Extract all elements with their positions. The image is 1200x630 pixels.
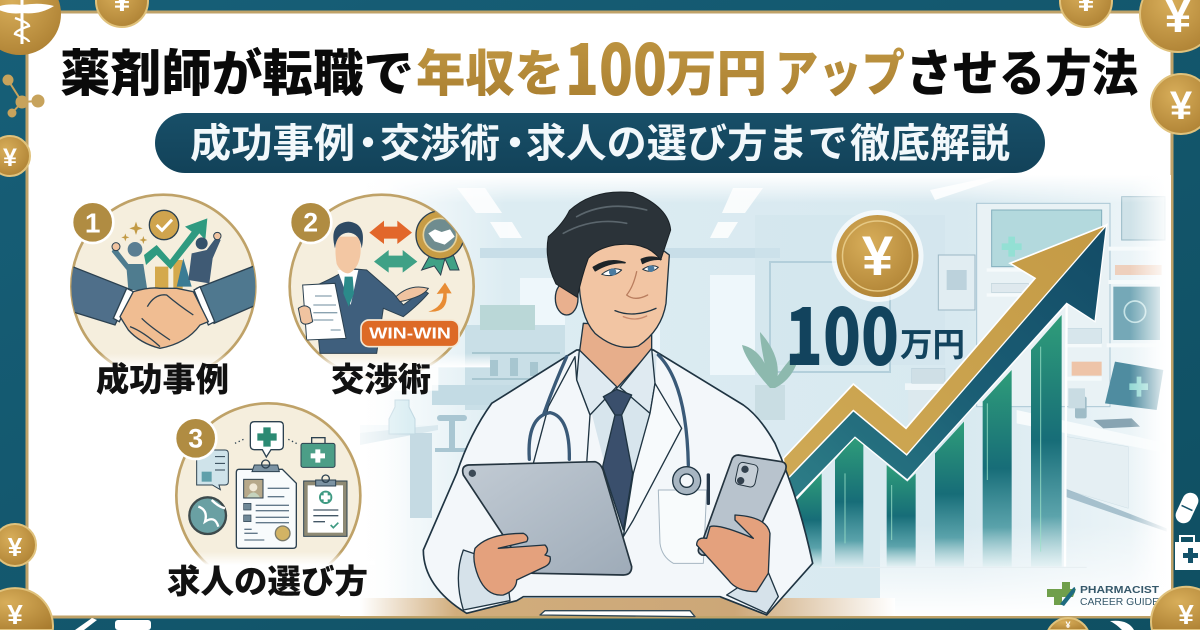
topic 1: 成功事例 bbox=[70, 193, 257, 369]
desk paper bbox=[540, 611, 695, 617]
number badge: 2 bbox=[303, 208, 318, 238]
left hand and cuff bbox=[458, 550, 510, 610]
check badge bbox=[149, 210, 179, 240]
label: 求人の選び方: 求人の選び方 bbox=[167, 555, 368, 603]
right cuff bbox=[727, 568, 778, 613]
sparkles bbox=[121, 222, 147, 244]
title: 年収を bbox=[416, 34, 564, 106]
yen coin bottom-left bbox=[0, 588, 53, 630]
topic 3: 求人の選び方 bbox=[165, 403, 375, 595]
green bars bbox=[793, 303, 1087, 567]
win-win tag bbox=[361, 320, 459, 347]
subtitle pill: 成功事例 bbox=[190, 111, 355, 169]
resume bbox=[236, 460, 296, 548]
yen coin bottom right bbox=[1151, 587, 1200, 630]
yen coin top right small bbox=[1060, 0, 1112, 27]
label: 成功事例: 成功事例 bbox=[96, 353, 229, 401]
number badge: 1 bbox=[85, 207, 100, 238]
gold yen coin bbox=[832, 210, 924, 302]
yen coin left lower bbox=[0, 524, 36, 566]
number badge: 3 bbox=[188, 424, 203, 454]
clipboard bbox=[304, 475, 347, 536]
orange arrows bbox=[369, 221, 412, 244]
yen coin bottom bbox=[1048, 618, 1088, 630]
amount label: 100万円: 100 bbox=[785, 276, 899, 388]
dark teal arrow band bbox=[785, 225, 1107, 500]
yen coin right bbox=[1151, 74, 1200, 134]
number badge bbox=[175, 418, 216, 459]
pen bbox=[707, 473, 710, 505]
caduceus coin bbox=[0, 0, 61, 55]
yen coin bottom: ¥ bbox=[1065, 620, 1071, 630]
fade under label bbox=[60, 353, 270, 370]
title: 万円 bbox=[666, 34, 767, 106]
title: 薬剤師が転職で bbox=[60, 34, 414, 106]
medical case icon bbox=[1175, 536, 1200, 570]
fade under label bbox=[280, 353, 490, 367]
offering hand bbox=[396, 287, 428, 302]
growth arrow bbox=[428, 283, 452, 312]
left figure bbox=[112, 242, 147, 290]
yen coin bottom-left: ¥ bbox=[7, 599, 23, 630]
globe bbox=[189, 497, 226, 534]
nose and smile bbox=[627, 272, 648, 298]
title: 100 bbox=[565, 15, 667, 116]
lab coat bbox=[423, 350, 813, 615]
line chart arrow with bars bbox=[783, 225, 1107, 567]
eyes and brows bbox=[593, 261, 625, 271]
yen coin right: ¥ bbox=[1170, 84, 1193, 128]
number badge bbox=[72, 202, 113, 243]
stethoscope bbox=[529, 355, 688, 465]
tie bbox=[603, 389, 633, 530]
ear bbox=[555, 282, 578, 315]
title: させる方法 bbox=[906, 34, 1138, 106]
award badge bbox=[416, 211, 464, 275]
subtitle pill: 求人の選び方まで bbox=[526, 111, 848, 169]
circle background bbox=[290, 195, 474, 379]
subtitle pill bbox=[155, 111, 1045, 173]
circle background bbox=[176, 403, 360, 587]
collar bbox=[577, 350, 617, 415]
title: アップ bbox=[775, 34, 905, 106]
lapels bbox=[533, 357, 590, 463]
gold yen coin: ¥ bbox=[862, 224, 893, 287]
subtitle pill: 交渉術 bbox=[380, 111, 500, 169]
chest piece bbox=[673, 467, 701, 495]
molecule icon bbox=[3, 75, 44, 117]
pocket bbox=[658, 490, 707, 563]
logo bbox=[1047, 582, 1160, 608]
topic 2: 交渉術 bbox=[280, 195, 490, 391]
hair bbox=[547, 192, 671, 297]
office background illustration bbox=[340, 175, 1171, 616]
yen coin left lower: ¥ bbox=[8, 532, 23, 562]
yen coin left upper: ¥ bbox=[3, 144, 17, 172]
neck bbox=[579, 323, 652, 388]
yen coin bottom right: ¥ bbox=[1178, 599, 1194, 630]
document bbox=[298, 283, 346, 340]
yen coin top bbox=[96, 0, 148, 27]
sleeves bbox=[67, 265, 132, 325]
tablet bbox=[463, 462, 632, 575]
chat document bbox=[197, 450, 228, 490]
amount label: 100万円: 万円 bbox=[900, 318, 965, 366]
logo: CAREER GUIDE bbox=[1080, 597, 1159, 608]
label: 交渉術: 交渉術 bbox=[331, 353, 431, 401]
phone bbox=[698, 455, 786, 557]
pill capsule icon bbox=[1173, 490, 1200, 526]
hands bbox=[120, 288, 208, 348]
shirt bbox=[577, 353, 657, 537]
negotiating person bbox=[313, 222, 428, 353]
medical case bbox=[301, 438, 335, 467]
number badge bbox=[290, 202, 331, 243]
bottom icons bbox=[75, 618, 1134, 630]
face bbox=[579, 238, 669, 347]
fade under label bbox=[165, 552, 375, 565]
logo: PHARMACIST bbox=[1080, 584, 1160, 596]
subtitle pill: ・ bbox=[348, 111, 388, 169]
title bbox=[60, 15, 1138, 116]
right figures bbox=[177, 232, 221, 287]
yen coin left upper bbox=[0, 136, 30, 176]
yen coin top right large bbox=[1140, 0, 1200, 52]
medical speech bubble bbox=[250, 422, 283, 457]
gold arrow band bbox=[783, 225, 1107, 482]
success scene bbox=[67, 210, 260, 348]
pharmacist figure bbox=[423, 192, 813, 617]
green arrows bbox=[374, 250, 417, 273]
subtitle pill: ・ bbox=[495, 111, 535, 169]
desk bbox=[360, 598, 895, 616]
circle background bbox=[71, 195, 255, 379]
right hand bbox=[697, 515, 770, 592]
subtitle pill: 徹底解説 bbox=[850, 111, 1010, 169]
win-win tag: WIN-WIN bbox=[369, 326, 451, 343]
